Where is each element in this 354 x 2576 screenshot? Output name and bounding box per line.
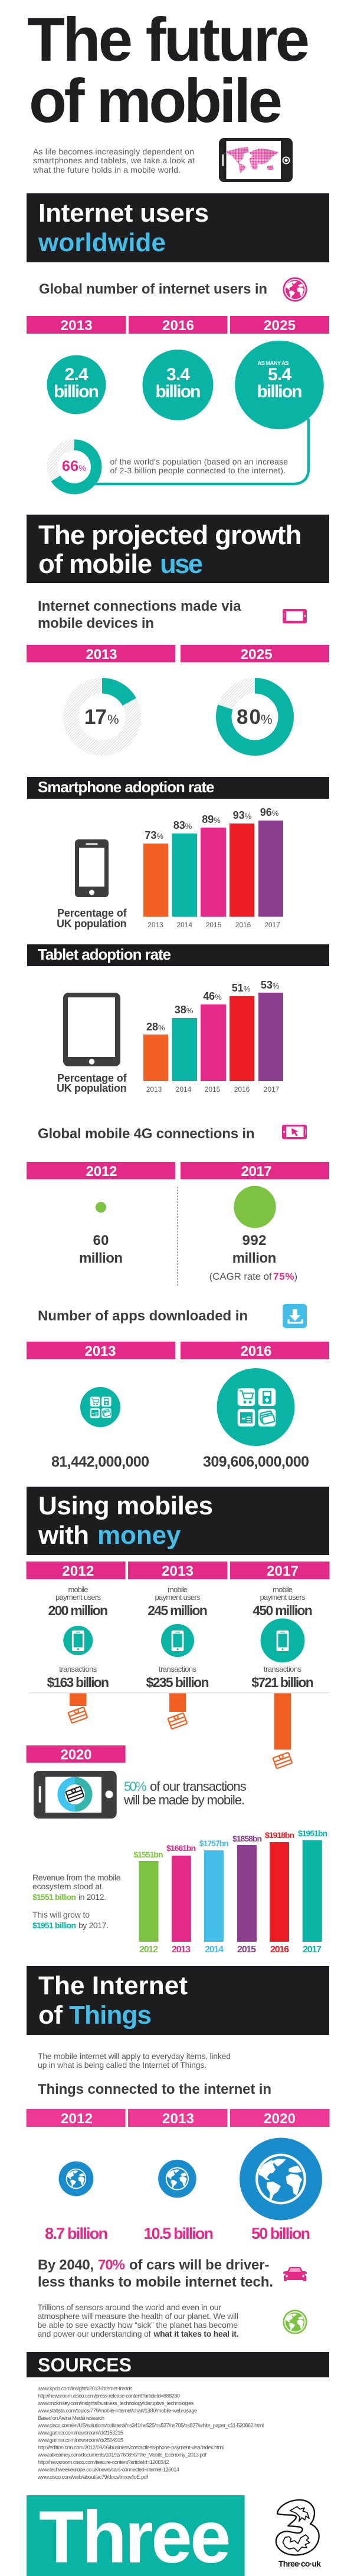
year headers: 2012 2013 2017: 2012	[62, 1563, 94, 1579]
text: world population note: of the world's population (based on an increase	[110, 457, 288, 466]
circle: 5.4 billion: billion	[257, 382, 302, 401]
stat: 992 million	[209, 1186, 297, 1282]
donut: 66 percent	[53, 445, 96, 489]
globe: 10.5 billion: 10.5 billion	[143, 2225, 214, 2242]
panel: projected growth heading: The projected growth	[38, 520, 302, 550]
bar chart: mobile ecosystem revenue: $1858bn	[232, 1834, 262, 1843]
bar chart: smartphone adoption: 2017	[264, 921, 280, 929]
text: trillions of sensors: be able to see exactly how “sick” the planet has become	[38, 2320, 238, 2330]
donut: 80 percent	[224, 686, 286, 748]
text: revenue: by 2017.	[78, 1921, 109, 1930]
panel: projected growth heading: of mobile	[38, 549, 152, 579]
icon: phone with world map	[219, 138, 293, 182]
text: driverless cars	[38, 2257, 273, 2290]
year headers: 2012 2013 2017	[27, 1562, 330, 1579]
donut: 66 percent: 66	[62, 458, 78, 475]
panel: internet of things heading	[27, 1966, 329, 2035]
text: revenue: Revenue from the mobile	[32, 1873, 121, 1882]
column: 2012 mobile payments: 200 million	[48, 1603, 108, 1618]
text: trillions of sensors: atmosphere will measure the health of our planet. We will	[38, 2311, 238, 2321]
text: internet of things intro: The mobile internet will apply to everyday items, linked	[38, 2051, 231, 2061]
panel: tablet adoption heading: Tablet adoption rate	[38, 946, 171, 963]
column: 2012 mobile payments: $163 billion	[47, 1675, 109, 1690]
bar chart: tablet adoption: 51	[232, 982, 244, 994]
text: sources list: www.gartner.com/newsroom/id/2153215	[37, 2430, 123, 2436]
apps circle: 2013: 81,442,000,000	[51, 1454, 149, 1470]
column: 2017 mobile payments: 450 million	[253, 1603, 313, 1618]
text: trillions of sensors: and power our understanding of	[38, 2329, 151, 2338]
text: driverless cars: 70%	[98, 2257, 125, 2273]
text: sources list	[37, 2386, 264, 2480]
bar chart: mobile ecosystem revenue: $1757bn	[199, 1839, 229, 1848]
panel: smartphone adoption heading	[27, 777, 329, 799]
stat: 992 million: )	[294, 1271, 297, 1282]
text: sources list: Based on Arena Media research	[38, 2415, 104, 2421]
logo: three: Three·co·uk	[278, 2559, 321, 2568]
stat: 60 million: 60	[93, 1233, 109, 1249]
label: percentage of UK population	[57, 907, 127, 930]
text: 50 percent of transactions: 50%	[124, 1779, 146, 1794]
circle: 2.4 billion: billion	[54, 382, 99, 401]
donut: 80 percent: 80	[237, 706, 261, 729]
text: world population note: of 2-3 billion people connected to the internet).	[110, 466, 286, 475]
panel: using mobiles with money heading: Using mobiles	[38, 1491, 213, 1520]
bar chart: tablet adoption: 53	[261, 979, 273, 991]
year headers: 2013 2016 2025	[27, 316, 329, 334]
label: percentage of UK population: UK population	[57, 918, 127, 930]
intro text: As life becomes increasingly dependent on	[33, 147, 194, 156]
panel: using mobiles with money heading: with	[38, 1521, 89, 1550]
year headers: 2013 2016: 2016	[241, 1343, 271, 1359]
year headers: 2012 2013 2020: 2012	[61, 2111, 93, 2127]
bar chart: smartphone adoption: 93	[233, 809, 245, 821]
year header: 2020	[27, 1745, 126, 1763]
text: trillions of sensors: Trillions of sensors around the world and even in our	[38, 2302, 221, 2312]
bar chart: tablet adoption	[143, 979, 283, 1093]
icon: smartphone	[75, 839, 109, 897]
icon: green globe	[283, 2310, 307, 2334]
bar chart: tablet adoption: 2014	[176, 1085, 192, 1093]
stat: 992 million: 75%	[273, 1271, 294, 1282]
heading: global number of internet users: Global number of internet users in	[39, 281, 267, 297]
text: sources list: www.mckinsey.com/insights/business_technology/disruptive_technologies	[37, 2400, 194, 2406]
heading: things connected to the internet: Things connected to the internet in	[38, 2081, 271, 2097]
panel: tablet adoption heading	[27, 944, 329, 966]
title	[27, 5, 310, 136]
year headers: 2012 2017: 2012	[86, 1164, 117, 1180]
text: internet of things intro	[38, 2051, 231, 2070]
year headers: 2013 2016 2025: 2016	[162, 318, 194, 334]
title: of mobile	[29, 67, 283, 136]
donut: 80 percent: %	[261, 712, 273, 727]
bar chart: mobile ecosystem revenue: $1951bn	[298, 1829, 327, 1838]
column: 2017 mobile payments: transactions	[264, 1665, 302, 1674]
column: 2013 mobile payments: $235 billion	[146, 1675, 209, 1690]
bar chart: smartphone adoption: %	[245, 812, 252, 821]
column: 2017 mobile payments: mobile	[273, 1585, 293, 1594]
stat: 60 million	[79, 1202, 123, 1266]
bar chart: smartphone adoption: 2013	[148, 921, 163, 929]
stat: 992 million: million	[232, 1250, 276, 1266]
intro text: what the future holds in a mobile world.	[32, 165, 181, 174]
circle: 3.4 billion: billion	[156, 382, 201, 401]
panel: internet users worldwide heading	[27, 193, 329, 262]
globe: 8.7 billion	[45, 2161, 108, 2242]
text: sources list: http://newsroom.cisco.com/press-release-content?articleId=888280	[38, 2393, 180, 2399]
year headers: 2013 2016 2025: 2025	[264, 318, 296, 334]
panel: internet of things heading: of	[38, 2001, 63, 2030]
footer: three brand panel: Three	[39, 2496, 231, 2576]
label: percentage of UK population	[57, 1072, 127, 1094]
heading: number of apps downloaded: Number of apps downloaded in	[38, 1308, 248, 1324]
panel: internet users worldwide heading: Internet users	[38, 199, 209, 228]
text: driverless cars: less thanks to mobile internet tech.	[38, 2274, 273, 2290]
year headers: 2013 2016	[27, 1342, 329, 1359]
icon: pink tablet with cursor	[282, 1125, 307, 1139]
connector line	[91, 419, 309, 484]
year headers: 2012 2013 2017: 2013	[162, 1563, 194, 1579]
icon: phone with 50 percent donut	[34, 1771, 117, 1819]
icon: download	[283, 1304, 307, 1328]
text: sources list: www.cisco.com/web/about/ac79/docs/innov/IoE.pdf	[37, 2474, 148, 2480]
circle: 5.4 billion: AS MANY AS	[257, 360, 289, 367]
icon: tablet	[63, 993, 120, 1066]
year headers: 2012 2013 2020: 2020	[264, 2111, 296, 2127]
text: 50 percent of transactions: of our transactions	[150, 1779, 247, 1794]
bar chart: tablet adoption: 2013	[146, 1085, 162, 1093]
globe: 8.7 billion: 8.7 billion	[45, 2225, 108, 2242]
panel: internet users worldwide heading: worldwide	[38, 228, 166, 257]
stat: 992 million: 992	[242, 1233, 267, 1249]
apps circle: 2013	[51, 1387, 149, 1470]
text: driverless cars: By 2040,	[38, 2257, 94, 2273]
panel: internet of things heading: Things	[69, 2001, 152, 2030]
column: 2012 mobile payments: mobile	[68, 1585, 88, 1594]
bar chart: mobile ecosystem revenue: 2015	[237, 1945, 256, 1955]
circle: 3.4 billion: 3.4	[166, 365, 190, 384]
panel: internet of things heading: The Internet	[38, 1971, 188, 2000]
column: 2013 mobile payments: payment users	[155, 1593, 201, 1602]
text: trillions of sensors	[38, 2302, 239, 2338]
bar chart: tablet adoption: 38	[175, 1004, 186, 1016]
bar chart: smartphone adoption	[143, 806, 283, 929]
circle: 5.4 billion	[235, 341, 324, 429]
title: The future	[27, 5, 310, 74]
bar chart: tablet adoption: %	[244, 984, 251, 993]
text: sources list: www.kpcb.com/insights/2013-internet-trends	[37, 2386, 133, 2391]
year headers: 2012 2013 2020: 2013	[162, 2111, 194, 2127]
bar chart: smartphone adoption: 83	[173, 819, 185, 831]
stat: 60 million: million	[79, 1250, 123, 1266]
bar chart: mobile ecosystem revenue: 2017	[303, 1945, 322, 1955]
donut: 66 percent: %	[78, 463, 86, 473]
year headers: 2013 2016 2025: 2013	[61, 318, 93, 334]
text: driverless cars: of cars will be driver-	[129, 2257, 269, 2273]
text: world population note	[110, 457, 288, 475]
bar chart: tablet adoption: %	[186, 1006, 194, 1015]
panel: smartphone adoption heading: Smartphone adoption rate	[38, 778, 215, 796]
panel: using mobiles with money heading	[27, 1487, 329, 1555]
year headers: 2012 2017: 2017	[241, 1164, 272, 1180]
bar chart: smartphone adoption: 2014	[176, 921, 192, 929]
text: internet of things intro: up in what is being called the Internet of Things.	[38, 2060, 206, 2070]
column: 2013 mobile payments: 245 million	[148, 1603, 208, 1618]
icon: pink globe	[283, 277, 307, 302]
column: 2012 mobile payments: transactions	[59, 1665, 97, 1674]
bar chart: mobile ecosystem revenue: $1918bn	[265, 1830, 294, 1840]
text: sources list: http://newsroom.cisco.com/feature-content?articleId=1208342	[38, 2459, 169, 2465]
heading: internet connections via mobile	[38, 598, 241, 631]
text: 50 percent of transactions	[123, 1779, 247, 1807]
column: 2017 mobile payments: payment users	[260, 1593, 306, 1602]
bar chart: smartphone adoption: 2016	[235, 921, 251, 929]
text: trillions of sensors: what it takes to heal it.	[153, 2329, 239, 2338]
donut: 17 percent: 17	[84, 706, 107, 729]
circle: 3.4 billion	[143, 350, 214, 420]
globe: 50 billion: 50 billion	[251, 2225, 310, 2242]
text: sources list: http://edition.cnn.com/2012/09/06/business/contactless-phone-payment-visa/index.html	[38, 2445, 224, 2450]
text: sources list: www.statista.com/topics/779/mobile-internet/chart/1380/mobile-web-usage	[37, 2407, 197, 2413]
bar chart: mobile ecosystem revenue	[133, 1829, 327, 1955]
text: revenue: This will grow to	[32, 1910, 90, 1919]
label: percentage of UK population: UK population	[57, 1082, 127, 1094]
circle: 5.4 billion: 5.4	[268, 365, 291, 384]
bar chart: tablet adoption: %	[273, 981, 280, 990]
logo: three	[276, 2500, 321, 2568]
text: sources list: www.techweekeurope.co.uk/news/cars-connected-internet-126014	[37, 2466, 179, 2472]
year header: 2020: 2020	[60, 1747, 92, 1763]
year headers: 2012 2013 2017: 2017	[267, 1563, 299, 1579]
text: sources list: www.cisco.com/en/US/solutions/collateral/ns341/ns525/ns537/ns705/ns827/white_paper_c11-520862.html	[37, 2423, 264, 2429]
heading: global mobile 4G connections: Global mobile 4G connections in	[38, 1126, 255, 1142]
heading: internet connections via mobile: Internet connections made via	[38, 598, 241, 614]
bar chart: mobile ecosystem revenue: 2014	[205, 1945, 224, 1955]
panel: sources heading: SOURCES	[38, 2354, 132, 2376]
year headers: 2013 2025: 2013	[86, 647, 117, 663]
bar chart: smartphone adoption: 73	[145, 829, 156, 841]
bar chart: smartphone adoption: 96	[260, 806, 272, 818]
column: 2013 mobile payments	[146, 1585, 209, 1690]
column: 2013 mobile payments: transactions	[159, 1665, 197, 1674]
bar chart: mobile ecosystem revenue: 2012	[139, 1945, 158, 1955]
icon: pink tablet	[283, 609, 307, 624]
bar chart: tablet adoption: 46	[203, 990, 215, 1002]
bar chart: mobile ecosystem revenue: 2016	[270, 1945, 289, 1955]
donut: 17 percent	[71, 686, 133, 748]
apps circle: 2016	[203, 1368, 309, 1470]
bar chart: tablet adoption: 2016	[234, 1085, 250, 1093]
text: revenue: in 2012.	[78, 1892, 106, 1902]
bar chart: smartphone adoption: %	[156, 832, 163, 841]
bar chart: tablet adoption: 2017	[264, 1085, 280, 1093]
text: revenue: ecosystem stood at	[32, 1882, 102, 1891]
text: revenue: $1551 billion	[32, 1892, 76, 1902]
panel: projected growth heading	[27, 515, 329, 583]
globe: 50 billion	[240, 2137, 322, 2242]
bar chart: transaction value	[68, 1693, 292, 1768]
stat: 992 million: (CAGR rate of	[209, 1271, 272, 1282]
year headers: 2012 2017	[27, 1162, 329, 1180]
text: 50 percent of transactions: will be made by mobile.	[123, 1793, 245, 1807]
panel: sources heading	[27, 2352, 329, 2377]
intro text	[32, 147, 195, 174]
panel: projected growth heading: use	[160, 549, 203, 579]
bar chart: mobile ecosystem revenue: $1661bn	[166, 1843, 196, 1853]
circle: 2.4 billion	[47, 355, 106, 414]
bar chart: smartphone adoption: 2015	[206, 921, 222, 929]
text: revenue	[32, 1873, 121, 1930]
bar chart: mobile ecosystem revenue: 2013	[172, 1945, 191, 1955]
apps circle: 2016: 309,606,000,000	[203, 1454, 309, 1470]
year headers: 2013 2025	[27, 645, 329, 663]
circle: 2.4 billion: 2.4	[65, 365, 88, 384]
heading: internet connections via mobile: mobile devices in	[38, 615, 154, 631]
text: sources list: www.atkearney.com/documents/10192/760890/The_Mobile_Economy_2013.pdf	[37, 2452, 206, 2458]
column: 2013 mobile payments: mobile	[168, 1585, 188, 1594]
year headers: 2013 2025: 2025	[241, 647, 273, 663]
year headers: 2013 2016: 2013	[85, 1343, 116, 1359]
bar chart: tablet adoption: 2015	[205, 1085, 221, 1093]
bar chart: tablet adoption: 28	[146, 1021, 158, 1033]
bar chart: smartphone adoption: %	[185, 822, 192, 831]
label: percentage of UK population: Percentage of	[57, 907, 127, 919]
donut: 17 percent: %	[107, 712, 119, 727]
column: 2012 mobile payments: payment users	[55, 1593, 101, 1602]
bar chart: tablet adoption: %	[215, 993, 222, 1002]
bar chart: smartphone adoption: 89	[202, 813, 214, 825]
icon: pink car	[283, 2267, 307, 2281]
bar chart: tablet adoption: %	[158, 1023, 165, 1032]
year headers: 2012 2013 2020	[27, 2109, 330, 2127]
label: percentage of UK population: Percentage of	[57, 1072, 127, 1084]
intro text: smartphones and tablets, we take a look at	[33, 156, 195, 165]
column: 2017 mobile payments	[251, 1585, 314, 1690]
globe: 10.5 billion	[143, 2160, 214, 2242]
text: revenue: $1951 billion	[32, 1921, 76, 1930]
column: 2012 mobile payments	[47, 1585, 109, 1690]
bar chart: mobile ecosystem revenue: $1551bn	[133, 1850, 163, 1859]
column: 2017 mobile payments: $721 billion	[251, 1675, 314, 1690]
bar chart: smartphone adoption: %	[214, 816, 221, 825]
bar chart: smartphone adoption: %	[272, 809, 279, 818]
text: sources list: www.gartner.com/newsroom/id/2504915	[37, 2437, 123, 2443]
panel: using mobiles with money heading: money	[97, 1521, 181, 1550]
